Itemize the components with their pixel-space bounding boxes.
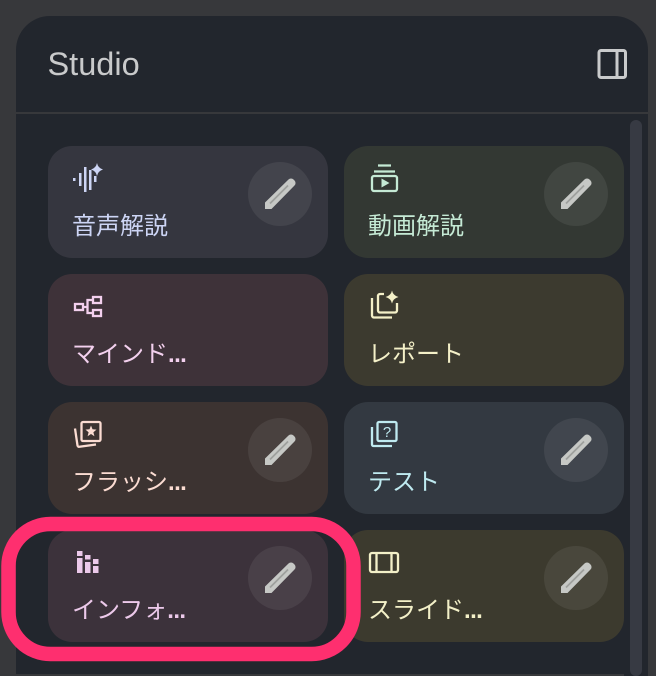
label: インフォ... [72,597,186,624]
callout: pink highlight ring [8,524,354,654]
card: slides [344,530,624,642]
label: 動画解説 [368,213,464,240]
icon: side panel toggle [599,50,626,78]
label: マインド... [72,341,186,368]
card: audio overview [48,146,328,258]
label: フラッシ... [72,469,186,496]
edit button [248,162,312,226]
card: flashcards [48,402,328,514]
label: スライド... [368,597,482,624]
card: video overview [344,146,624,258]
edit button [544,418,608,482]
edit button [544,162,608,226]
label: テスト [368,469,440,496]
scrollbar [630,120,642,676]
edit button [248,546,312,610]
icon: video [372,166,397,191]
icon: infographic bars [77,551,98,573]
label: レポート [368,341,464,368]
card: report [344,274,624,386]
icon: quiz: ? [383,424,391,441]
label: 音声解説 [72,213,168,240]
card: test [344,402,624,514]
icon: quiz [372,422,396,446]
card: mind map [48,274,328,386]
icon: flashcards [75,422,100,447]
icon: audio sparkle [73,163,103,192]
icon: slides [370,553,398,572]
edit button [544,546,608,610]
heading: Studio: Studio [48,46,140,82]
card: infographic [48,530,328,642]
icon: mind map [75,297,101,316]
icon: report [372,290,398,318]
edit button [248,418,312,482]
